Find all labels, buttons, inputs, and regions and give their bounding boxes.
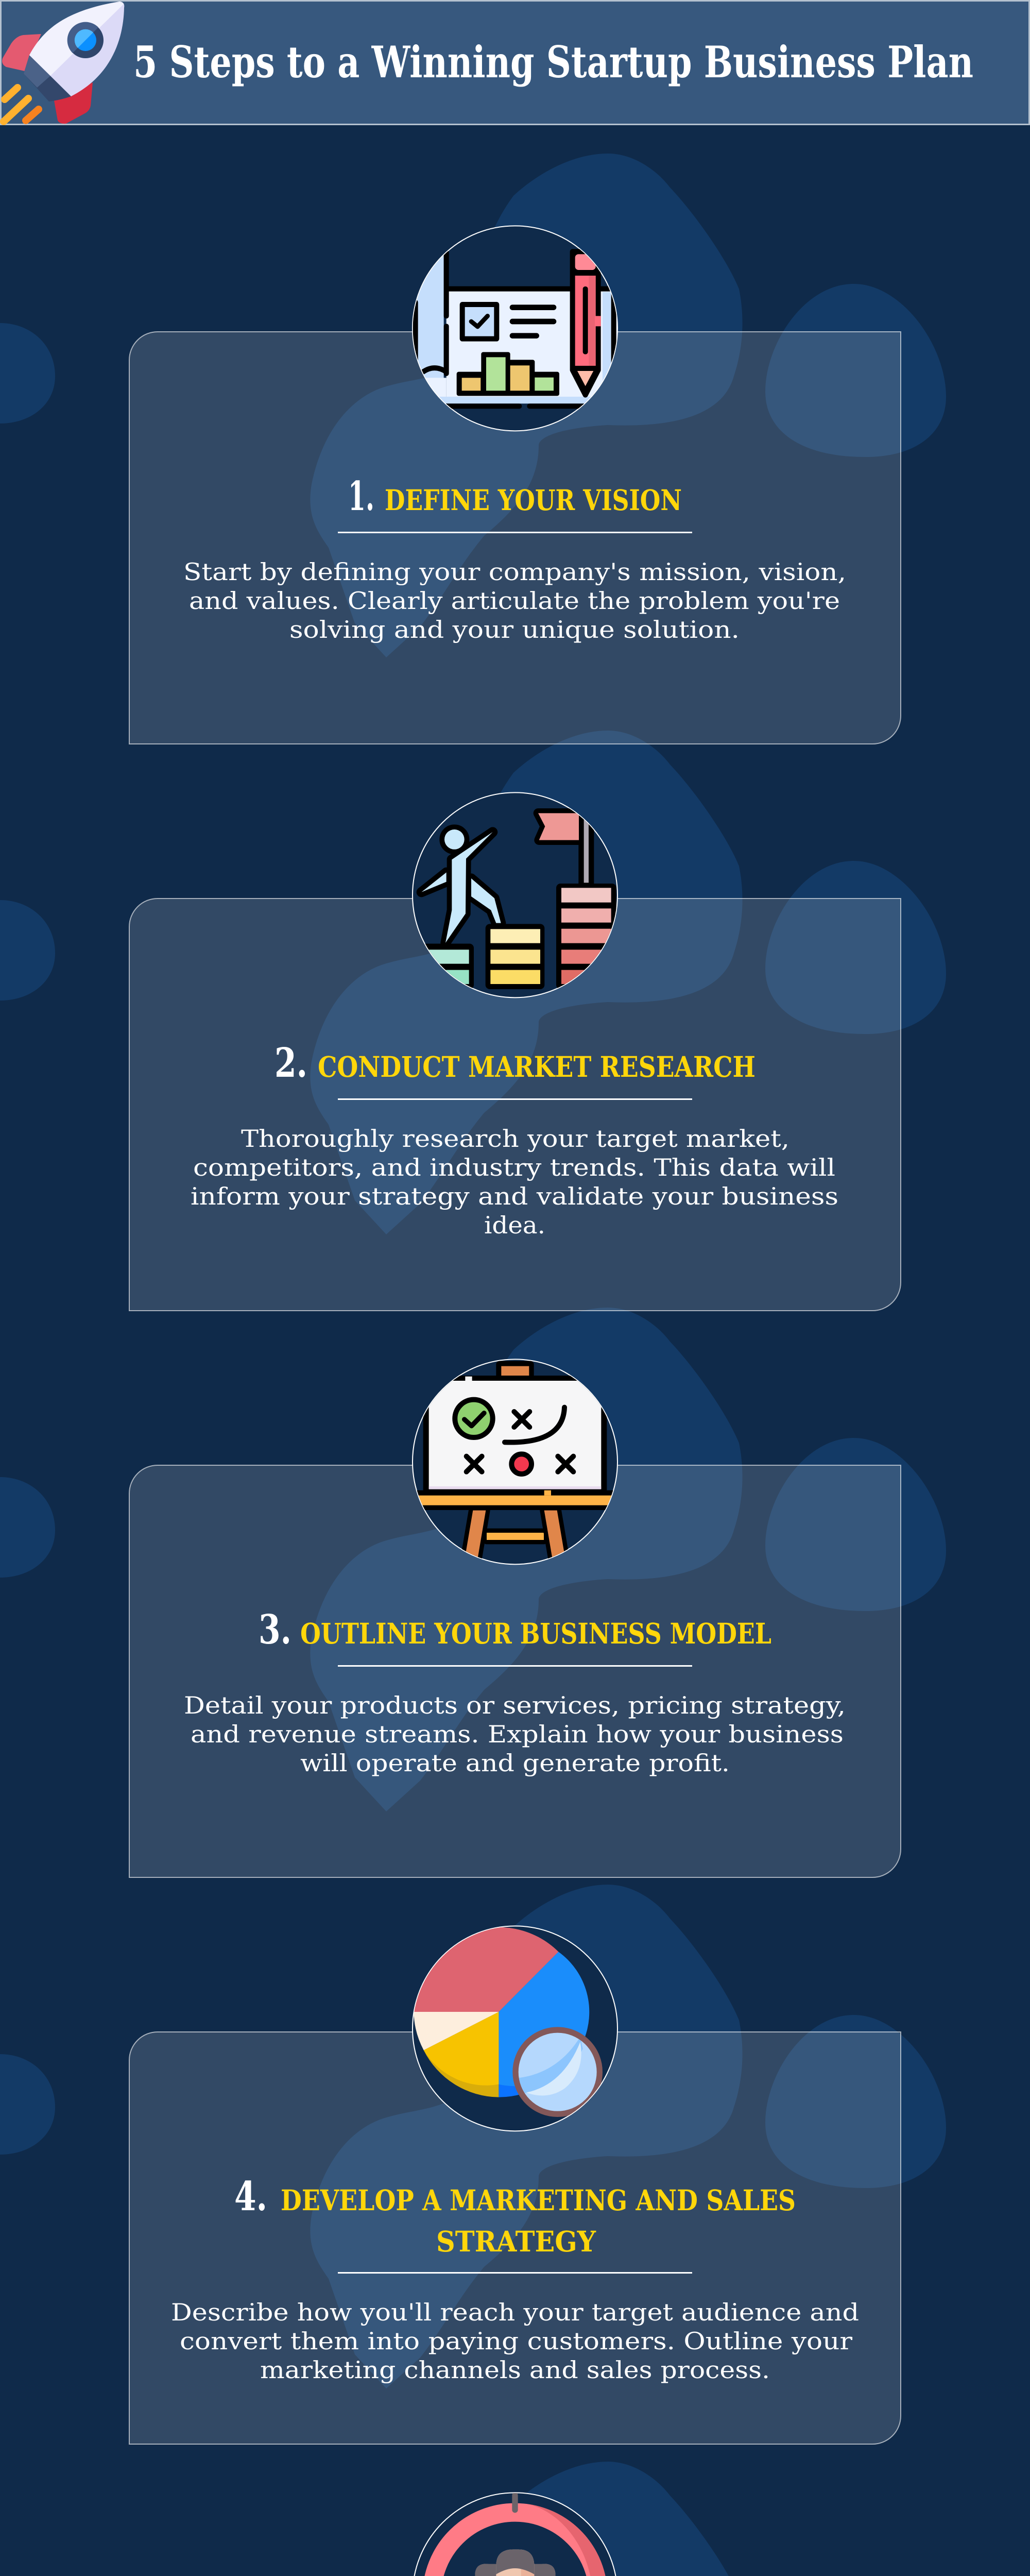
heading: step 2 <box>274 1040 756 1087</box>
heading: step 1: DEFINE YOUR VISION <box>385 483 682 517</box>
text: step 1: Start by defining your company's mission, vision, <box>183 558 846 586</box>
icon: pie chart with magnifier <box>413 1926 617 2131</box>
header panel <box>1 1 1029 125</box>
text: step 1: and values. Clearly articulate the problem you're <box>189 587 840 615</box>
icon: strategy board on easel <box>412 1359 618 1564</box>
heading: step 3: OUTLINE YOUR BUSINESS MODEL <box>300 1617 771 1650</box>
heading: step 4 <box>234 2173 796 2258</box>
heading: step 1: 1. <box>348 473 374 520</box>
heading: step 1 <box>348 473 682 520</box>
panel: step 1 <box>129 226 901 744</box>
icon: plan document with pencil <box>412 226 618 431</box>
text: step 1: solving and your unique solution. <box>289 616 740 643</box>
heading: step 3: 3. <box>259 1606 291 1653</box>
text: step 4: convert them into paying customers. Outline your <box>180 2327 852 2355</box>
text: step 2: idea. <box>484 1211 545 1239</box>
text: step 3: Detail your products or services, pricing strategy, <box>184 1691 846 1719</box>
text: step 3: and revenue streams. Explain how your business <box>191 1720 844 1748</box>
text: step 3 <box>184 1691 846 1777</box>
text: step 2: inform your strategy and validate your business <box>191 1182 838 1210</box>
panel: step 4 <box>129 1926 901 2444</box>
text: step 4: Describe how you'll reach your target audience and <box>171 2298 859 2326</box>
heading: step 2: CONDUCT MARKET RESEARCH <box>318 1050 756 1083</box>
panel: step 2 <box>129 792 901 1311</box>
text: step 1 <box>183 558 846 643</box>
heading: step 2: 2. <box>274 1040 307 1087</box>
icon: person climbing to flag <box>412 792 617 997</box>
icon: rocket <box>2 2 124 124</box>
heading: step 4: STRATEGY <box>436 2225 596 2258</box>
heading: step 4: DEVELOP A MARKETING AND SALES <box>281 2183 796 2217</box>
text: step 2: competitors, and industry trends. This data will <box>193 1154 835 1181</box>
heading: step 3 <box>259 1606 771 1653</box>
heading: step 4: 4. <box>234 2173 267 2220</box>
panel: step 3 <box>129 1359 901 1877</box>
text: step 3: will operate and generate profit. <box>300 1749 730 1777</box>
text: step 2 <box>191 1125 838 1239</box>
panel: step 5 <box>414 2492 616 2576</box>
text: step 4: marketing channels and sales process. <box>260 2356 770 2384</box>
icon: target audience <box>413 2493 617 2576</box>
text: step 2: Thoroughly research your target market, <box>241 1125 789 1153</box>
text: step 4 <box>171 2298 859 2384</box>
